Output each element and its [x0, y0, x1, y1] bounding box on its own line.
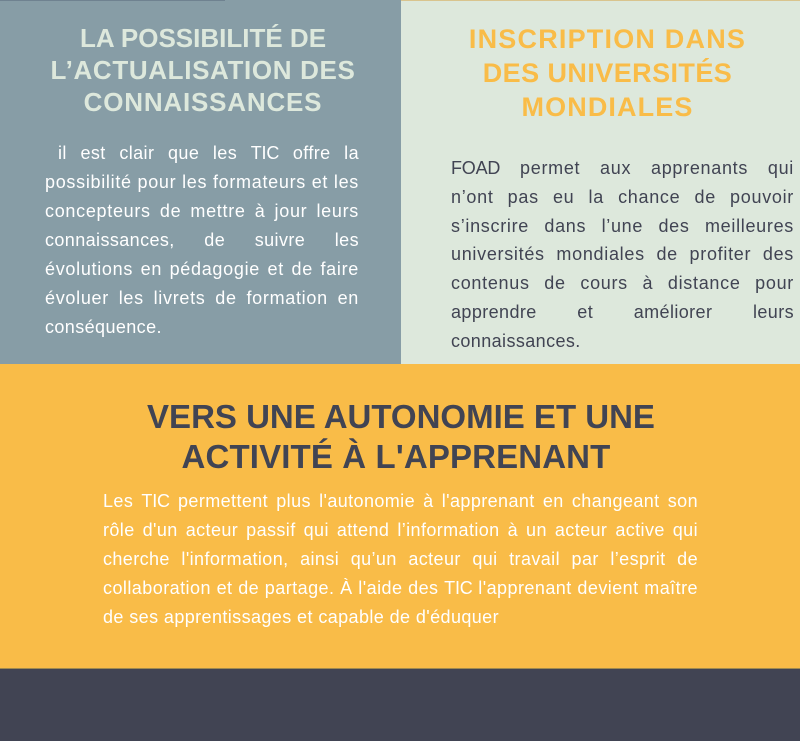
text block: possibility body: évoluer les livrets de formation en — [45, 288, 359, 308]
heading: inscription: INSCRIPTION DANS — [469, 24, 746, 54]
panel: towards learner autonomy — [0, 364, 800, 668]
text block: inscription body: apprendre et améliorer leurs — [451, 302, 794, 322]
heading: la possibilité — [51, 23, 355, 117]
text block: autonomie body: de ses apprentissages et capable de d'éduquer — [103, 607, 499, 627]
heading: inscription: DES UNIVERSITÉS — [483, 58, 732, 88]
text block: inscription body: s’inscrire dans l’une des meilleures — [451, 216, 794, 236]
text block: autonomie body: Les TIC permettent plus l'autonomie à l'apprenant en changeant son — [103, 491, 698, 511]
top edge strip — [401, 0, 800, 1]
heading: autonomie: VERS UNE AUTONOMIE ET UNE — [147, 398, 655, 435]
text block: possibility body: il est clair que les TIC offre la — [58, 143, 359, 163]
text block: possibility body: connaissances, de suivre les — [45, 230, 359, 250]
text block: possibility body: concepteurs de mettre à jour leurs — [45, 201, 359, 221]
text block: inscription body: FOAD permet aux apprenants qui — [451, 158, 794, 178]
heading: la possibilité: L’ACTUALISATION DES — [51, 55, 355, 85]
text block: possibility body — [45, 143, 359, 337]
text block: possibility body: possibilité pour les formateurs et les — [45, 172, 359, 192]
text block: autonomie body: cherche l'information, ainsi qu’un acteur qui travail par l’esprit de — [103, 549, 698, 569]
heading: la possibilité: LA POSSIBILITÉ DE — [80, 23, 326, 53]
heading: la possibilité: CONNAISSANCES — [84, 87, 322, 117]
text block: autonomie body: rôle d'un acteur passif qui attend l’information à un acteur active qui — [103, 520, 698, 540]
text block: inscription body: universités mondiales de profiter des — [451, 244, 794, 264]
heading: autonomie: ACTIVITÉ À L'APPRENANT — [182, 438, 610, 475]
footer band — [0, 668, 800, 741]
top edge strip — [0, 0, 225, 1]
text block: autonomie body — [103, 491, 698, 627]
heading: inscription: MONDIALES — [522, 92, 693, 122]
text block: possibility body: conséquence. — [45, 317, 162, 337]
panel: enrolment in world universities — [401, 0, 800, 364]
text block: inscription body — [451, 158, 794, 351]
text block: autonomie body: collaboration et de partage. À l'aide des TIC l'apprenant devient maître — [103, 578, 698, 598]
text block: inscription body: connaissances. — [451, 331, 581, 351]
heading: inscription — [469, 24, 746, 122]
heading: autonomie — [147, 398, 655, 475]
text block: inscription body: contenus de cours à distance pour — [451, 273, 794, 293]
panel: possibility of updating knowledge — [0, 0, 401, 364]
text block: possibility body: évolutions en pédagogie et de faire — [45, 259, 359, 279]
text block: inscription body: n’ont pas eu la chance de pouvoir — [451, 187, 794, 207]
